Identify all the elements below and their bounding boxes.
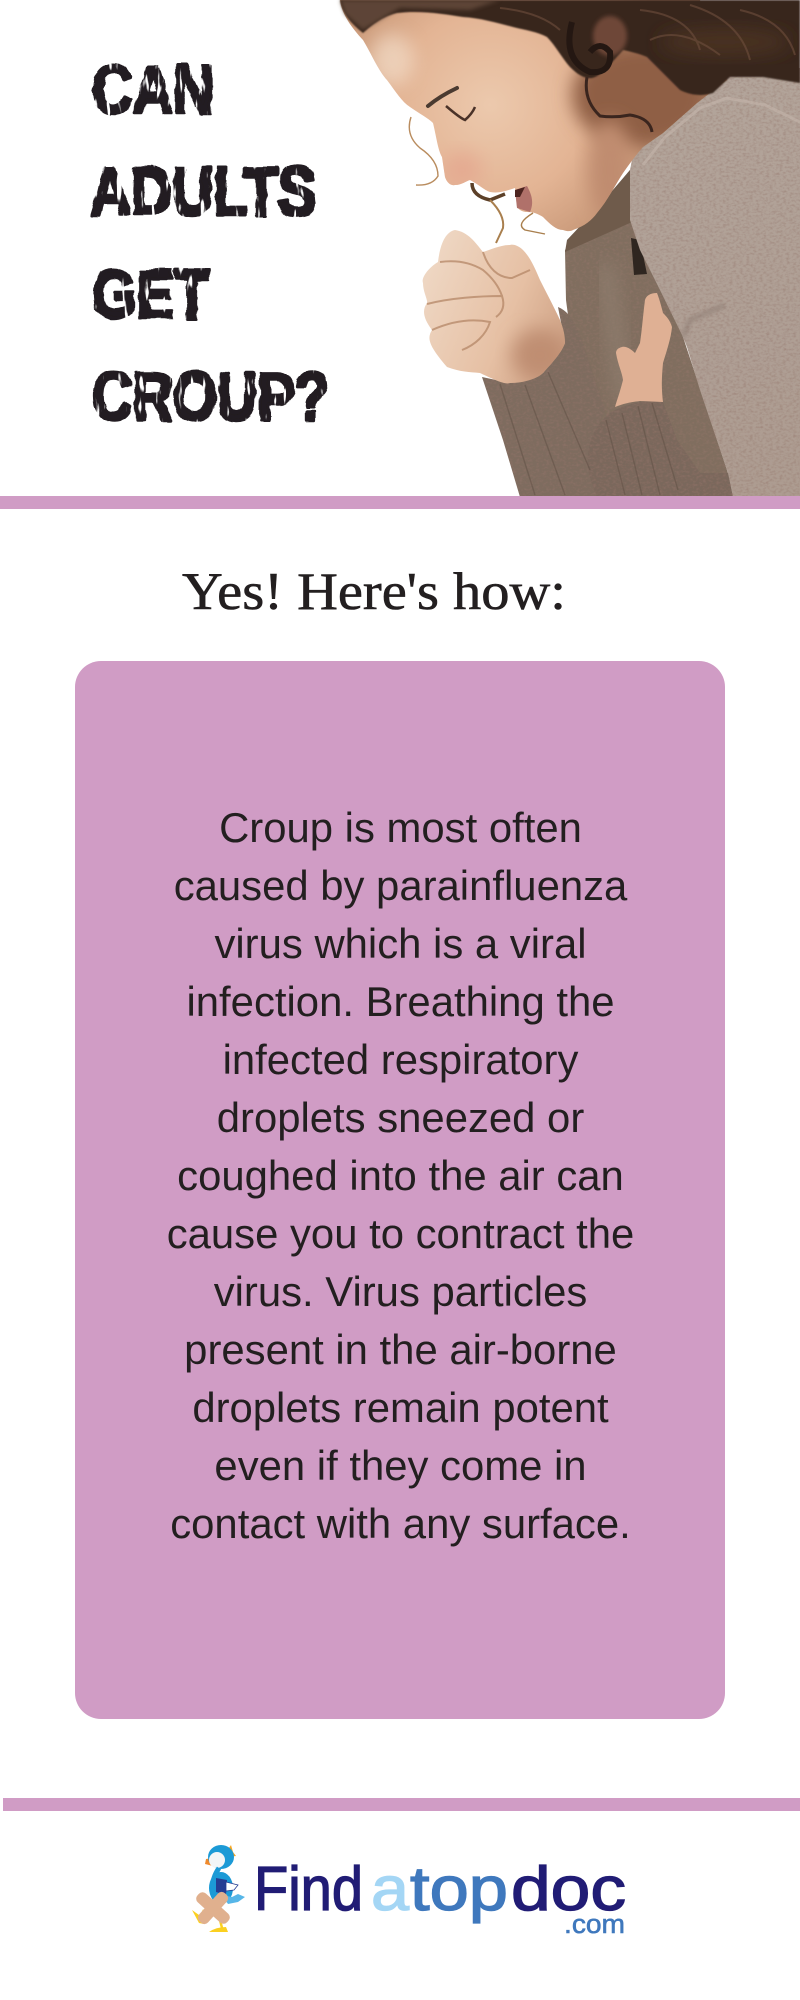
title line: GET: GET	[92, 256, 209, 333]
body text: Croup is most often	[219, 804, 582, 851]
body text: droplets remain potent	[192, 1384, 609, 1431]
curl under nose	[472, 183, 505, 200]
body text: virus which is a viral	[214, 920, 587, 967]
title	[90, 51, 329, 435]
wordmark: doc: doc	[511, 1855, 626, 1924]
second cuff	[587, 401, 733, 497]
jaw shading	[588, 120, 632, 220]
wordmark: Find: Find	[254, 1855, 363, 1924]
body text: droplets sneezed or	[217, 1094, 584, 1141]
icon: duck mascot with bandage	[185, 1845, 245, 1936]
body text: caused by parainfluenza	[174, 862, 627, 909]
eyebrow	[428, 88, 457, 106]
body text: cause you to contract the	[167, 1210, 634, 1257]
body text: coughed into the air can	[177, 1152, 624, 1199]
title line: CAN: CAN	[92, 51, 214, 128]
title line: ADULTS: ADULTS	[90, 153, 316, 230]
body text	[167, 804, 634, 1547]
cardigan inner panel	[565, 170, 733, 497]
body text: infection. Breathing the	[186, 978, 615, 1025]
body text: virus. Virus particles	[214, 1268, 587, 1315]
wordmark: .com: .com	[564, 1909, 625, 1939]
photo: woman coughing into fist	[338, 0, 800, 496]
top divider bar	[0, 496, 800, 509]
cardigan collar ribbing	[565, 170, 632, 252]
hair strands	[500, 5, 795, 60]
bottom divider bar	[3, 1798, 800, 1811]
stray curl by forehead	[409, 117, 438, 185]
sweater fold	[683, 305, 725, 337]
body text: infected respiratory	[223, 1036, 578, 1083]
wordmark: a: a	[371, 1855, 410, 1924]
body text: present in the air-borne	[184, 1326, 617, 1373]
sweater seam	[643, 98, 800, 165]
body text: even if they come in	[214, 1442, 587, 1489]
neck curl	[586, 77, 652, 132]
finger creases	[427, 252, 530, 350]
mouth	[515, 186, 532, 212]
forehead highlight	[370, 34, 414, 86]
face and neck	[340, 0, 727, 231]
dark gap in collar	[631, 238, 647, 275]
title line: CROUP?: CROUP?	[92, 358, 329, 435]
cuff ribbing	[500, 372, 678, 495]
small hand on chest	[615, 293, 672, 407]
panel: explanation card	[75, 661, 725, 1719]
closed eye	[446, 106, 475, 120]
main sweater body	[630, 68, 800, 497]
fist	[423, 230, 568, 383]
coughing arm sleeve	[482, 307, 605, 497]
ear curl	[569, 22, 610, 72]
hair	[340, 0, 800, 243]
neck shadow	[572, 43, 708, 147]
curl by chin	[521, 213, 545, 234]
subheading: Yes! Here's how:	[182, 563, 566, 621]
body text: contact with any surface.	[170, 1500, 631, 1547]
cardigan highlight	[605, 265, 625, 400]
wordmark: top: top	[410, 1855, 508, 1924]
logo: Findatopdoc.com	[192, 1845, 626, 1939]
nose blush	[442, 153, 479, 186]
